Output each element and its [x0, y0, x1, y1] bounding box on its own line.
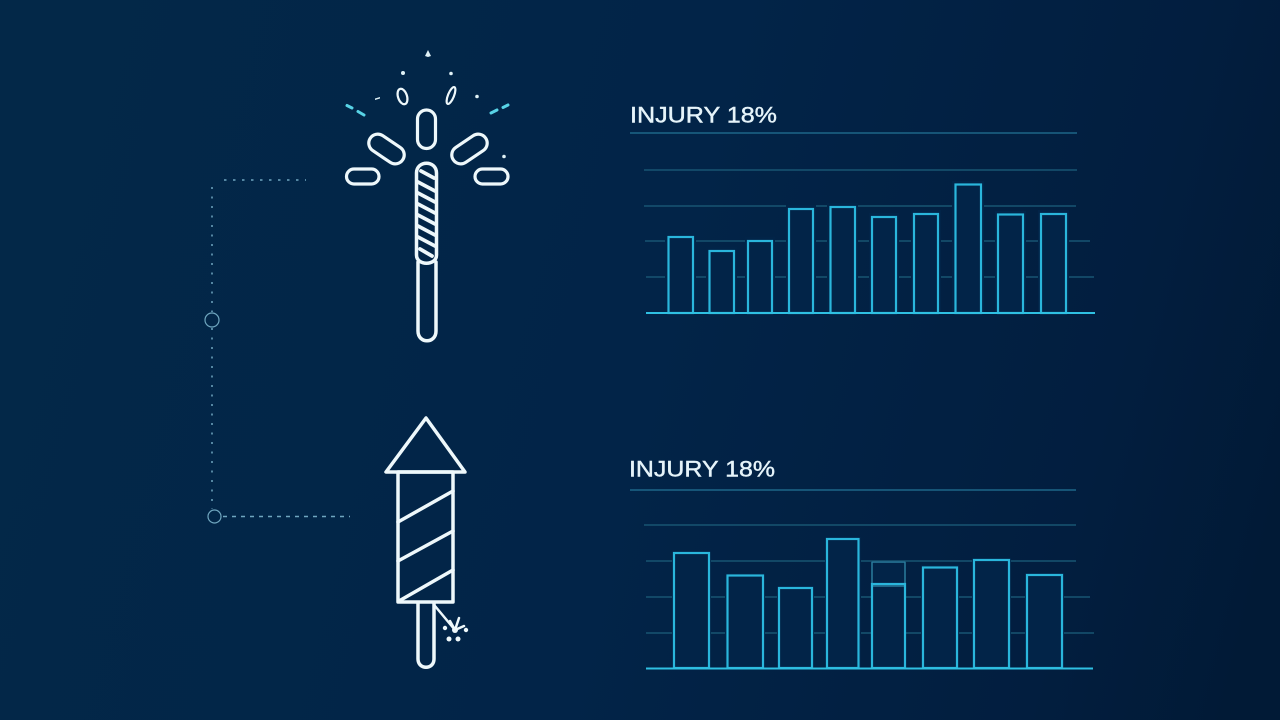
grid lines — [630, 133, 1094, 277]
bar chart: bottom — [630, 490, 1094, 668]
burst capsules — [346, 110, 508, 184]
bar chart: top — [630, 133, 1095, 313]
grid gaps around bars — [672, 537, 1064, 667]
rocket stick — [418, 603, 434, 667]
rocket stripes — [398, 491, 453, 601]
bars — [674, 539, 1062, 668]
baseline — [646, 668, 1093, 670]
ghost bar — [872, 562, 905, 586]
rocket nose cone — [386, 418, 465, 472]
icon: sparkler — [346, 50, 508, 341]
sparkler head with stripes — [416, 163, 436, 263]
baseline — [646, 312, 1095, 314]
small ellipse sparks — [396, 86, 457, 105]
sparkler stick — [418, 262, 436, 341]
grid lines — [630, 490, 1094, 633]
grid gaps around bars — [665, 181, 1069, 312]
cyan dashes — [347, 105, 508, 115]
rocket fuse and spark — [435, 606, 468, 642]
heading: bottom chart: INJURY 18% — [629, 456, 775, 482]
heading: top chart: INJURY 18% — [630, 102, 777, 128]
icon: rocket — [386, 418, 468, 667]
rocket body — [398, 472, 453, 602]
bars — [668, 184, 1066, 313]
dotted connector between icons — [205, 180, 350, 523]
dot sparks — [375, 50, 506, 158]
